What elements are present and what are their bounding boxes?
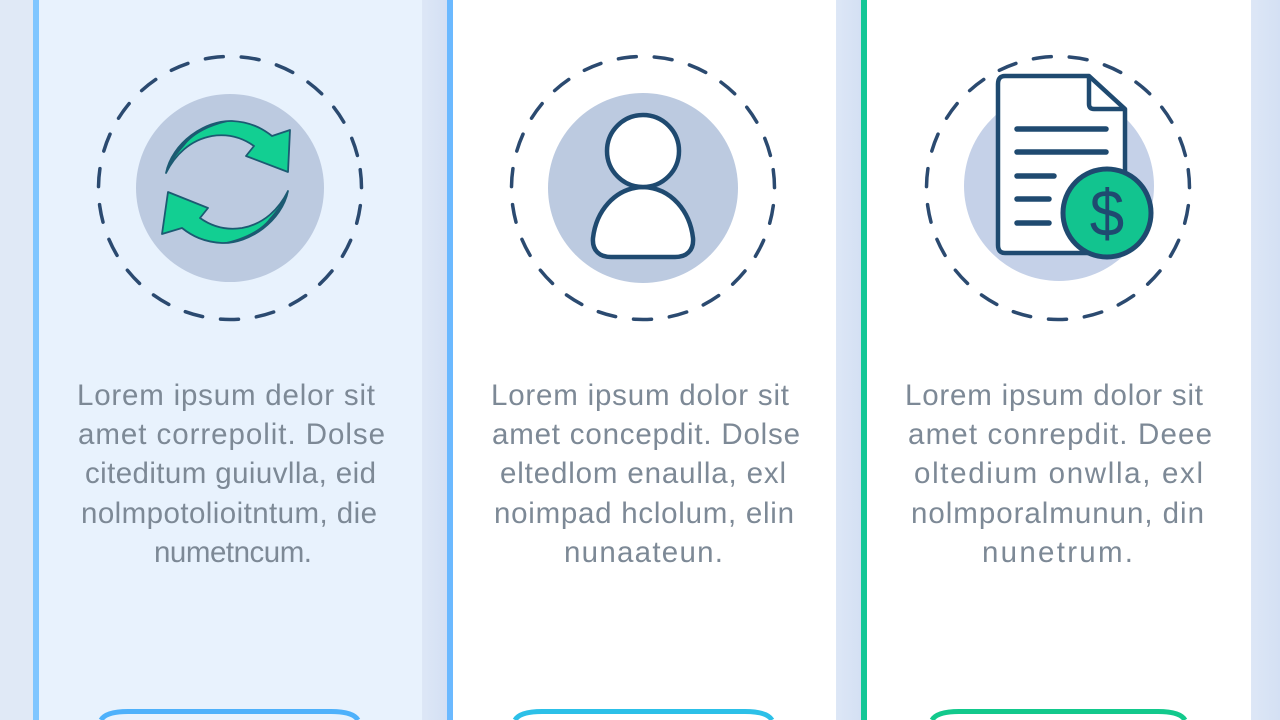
card 1 accent border xyxy=(33,0,39,720)
card 3 text: amet conrepdit. Deee xyxy=(908,418,1212,451)
card 2 text: Lorem ipsum dolor sit xyxy=(491,379,789,412)
panel: card 3 invoice xyxy=(861,0,1251,720)
icon: person xyxy=(548,93,738,283)
card 3 button xyxy=(932,712,1185,720)
card 2 text: noimpad hclolum, elin xyxy=(494,497,794,530)
card 3 background xyxy=(861,0,1251,720)
card 2 background xyxy=(447,0,836,720)
card 3 text: nolmporalmunun, din xyxy=(911,497,1204,530)
icon: dashed ring 2 xyxy=(494,39,792,337)
icon: invoice document with dollar: $ xyxy=(1090,176,1124,250)
icon: invoice document with dollar xyxy=(964,76,1154,281)
icon: dashed ring 1 xyxy=(81,39,379,337)
card 3 text: nunetrum. xyxy=(982,536,1133,569)
icon: refresh arrows xyxy=(136,94,324,282)
card 1 text xyxy=(77,379,385,569)
card 2 button xyxy=(515,712,772,720)
card 2 text: eltedlom enaulla, exl xyxy=(500,457,786,490)
card 2 text: amet concepdit. Dolse xyxy=(492,418,800,451)
card 1 text: citeditum guiuvlla, eid xyxy=(85,457,376,490)
card 1 text: nolmpotolioitntum, die xyxy=(81,497,377,530)
icon: dashed ring 3 xyxy=(909,39,1207,337)
card 1 text: numetncum. xyxy=(154,536,312,569)
card 2 text: nunaateun. xyxy=(564,536,723,569)
panel: card 2 person xyxy=(447,0,836,720)
card 1 background xyxy=(33,0,422,720)
card 3 text: oltedium onwlla, exl xyxy=(914,457,1203,490)
card 2 text xyxy=(491,379,800,569)
card 3 text: Lorem ipsum dolor sit xyxy=(905,379,1203,412)
panel: card 1 refresh xyxy=(33,0,422,720)
card 1 text: Lorem ipsum delor sit xyxy=(77,379,375,412)
card 3 text xyxy=(905,379,1212,569)
card 1 button xyxy=(101,712,358,720)
card 3 accent border xyxy=(861,0,867,720)
card 2 accent border xyxy=(447,0,453,720)
card 1 text: amet correpolit. Dolse xyxy=(78,418,385,451)
